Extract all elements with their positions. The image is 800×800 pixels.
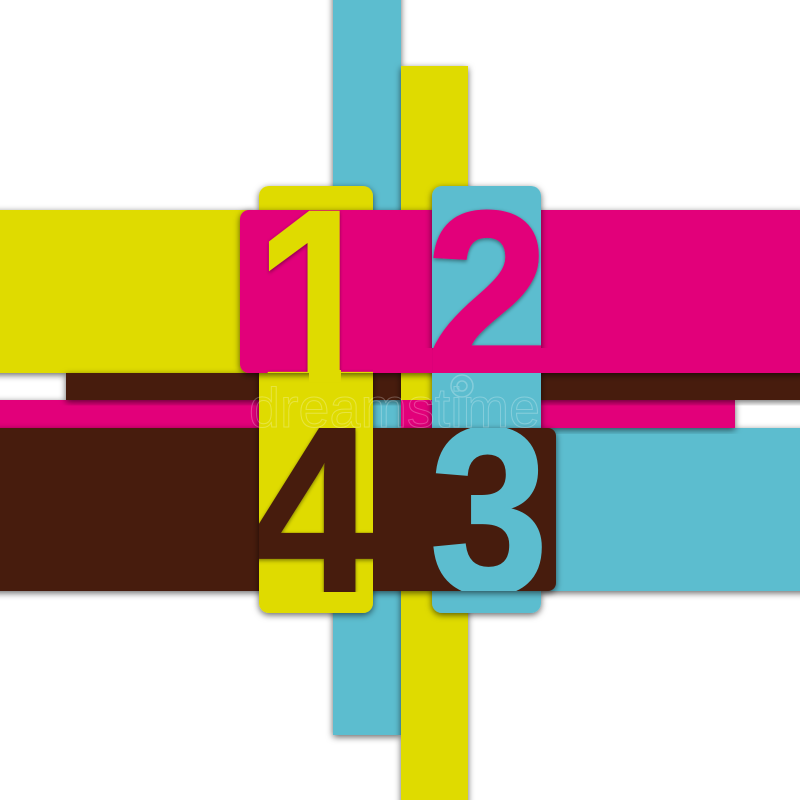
patch: yellow stem of number 1 blending into tab (309, 370, 341, 382)
tab: yellow rounded column (259, 186, 373, 613)
bar: yellow left horizontal (0, 210, 255, 373)
strip: brown horizontal (66, 373, 800, 400)
number 2: 2 (426, 163, 549, 422)
bar: yellow vertical (401, 66, 468, 800)
watermark: dreamstime (249, 376, 540, 439)
number 1: 1 (253, 152, 383, 459)
number 3: 3 (430, 379, 548, 642)
strip: pink crossing segment (401, 400, 432, 428)
bar: brown right section (373, 425, 561, 598)
bar: brown left section (0, 428, 290, 591)
number 4: 4 (250, 379, 377, 642)
bar: blue vertical (333, 0, 401, 735)
tab: blue rounded column (432, 186, 541, 613)
bar: pink top horizontal (240, 210, 800, 373)
bar: blue right horizontal (540, 428, 800, 591)
strip: pink horizontal (0, 400, 735, 428)
patch: pink foot blending across blue tab (424, 348, 549, 373)
